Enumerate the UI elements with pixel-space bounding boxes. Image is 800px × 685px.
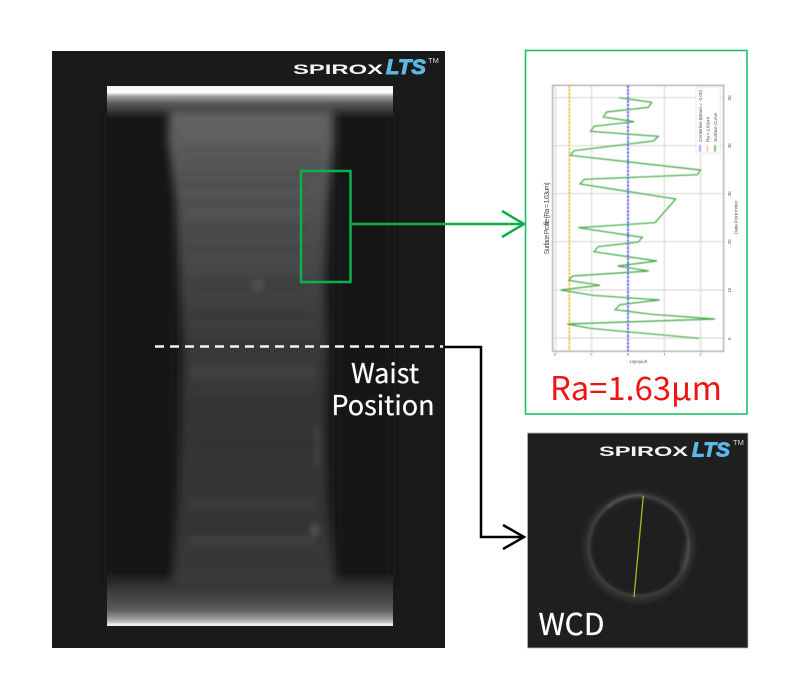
yellow diameter line bbox=[634, 496, 643, 597]
cylinder body bbox=[168, 110, 336, 585]
arrow: black to WCD bbox=[444, 347, 524, 549]
green selection box bbox=[301, 171, 350, 282]
chart text: Ra = 1.63um bbox=[705, 117, 711, 142]
chart text: 0 bbox=[626, 352, 629, 357]
logo: SPIROX LTS on main image: LTS bbox=[386, 56, 426, 79]
chart text: 10 bbox=[727, 287, 732, 293]
chart text: 30 bbox=[727, 191, 732, 196]
ring cross-section bbox=[587, 495, 691, 599]
logo: SPIROX LTS on WCD image: TM bbox=[733, 438, 744, 447]
logo: SPIROX LTS on WCD image: LTS bbox=[692, 440, 731, 462]
logo: SPIROX LTS on main image: TM bbox=[428, 56, 439, 65]
label: Waist Position: Position bbox=[331, 384, 435, 423]
panel: X-ray side view bbox=[52, 51, 445, 648]
chart text: -2 bbox=[553, 352, 557, 357]
chart text: 1 bbox=[662, 352, 665, 357]
logo: SPIROX LTS on main image: SPIROX bbox=[293, 61, 384, 77]
chart text bbox=[544, 90, 740, 364]
panel: WCD cross-section bbox=[528, 433, 748, 648]
value: Ra: Ra=1.63μm bbox=[550, 363, 722, 410]
waist position dashed line bbox=[155, 345, 443, 348]
logo: SPIROX LTS on main image bbox=[293, 56, 439, 79]
chart text: 20 bbox=[727, 239, 732, 244]
label: Waist Position bbox=[331, 352, 435, 423]
logo: SPIROX LTS on WCD image: SPIROX bbox=[599, 444, 688, 459]
chart text: Data Point Index bbox=[734, 200, 740, 234]
panel: surface profile frame bbox=[526, 50, 747, 414]
top bright band bbox=[107, 86, 393, 118]
chart text: Surface Profile (Ra = 1.63um) bbox=[544, 182, 551, 254]
logo: SPIROX LTS on WCD image bbox=[599, 438, 744, 462]
chart text: μm/index bbox=[629, 359, 647, 364]
line chart: surface profile bbox=[544, 85, 740, 364]
chart text: -1 bbox=[589, 352, 593, 357]
label: Waist Position: Waist bbox=[351, 352, 419, 391]
chart text: Centerline (Mean = -0.00) bbox=[698, 90, 704, 142]
chart text: 40 bbox=[727, 143, 732, 148]
chart text: 2 bbox=[699, 352, 702, 357]
chart text: Surface Curve bbox=[713, 112, 719, 142]
chart text: 50 bbox=[727, 95, 732, 100]
chart text: 0 bbox=[727, 337, 732, 340]
bottom bright band bbox=[107, 572, 393, 626]
arrow: green to surface profile bbox=[351, 211, 524, 237]
label: WCD: WCD bbox=[538, 600, 604, 644]
